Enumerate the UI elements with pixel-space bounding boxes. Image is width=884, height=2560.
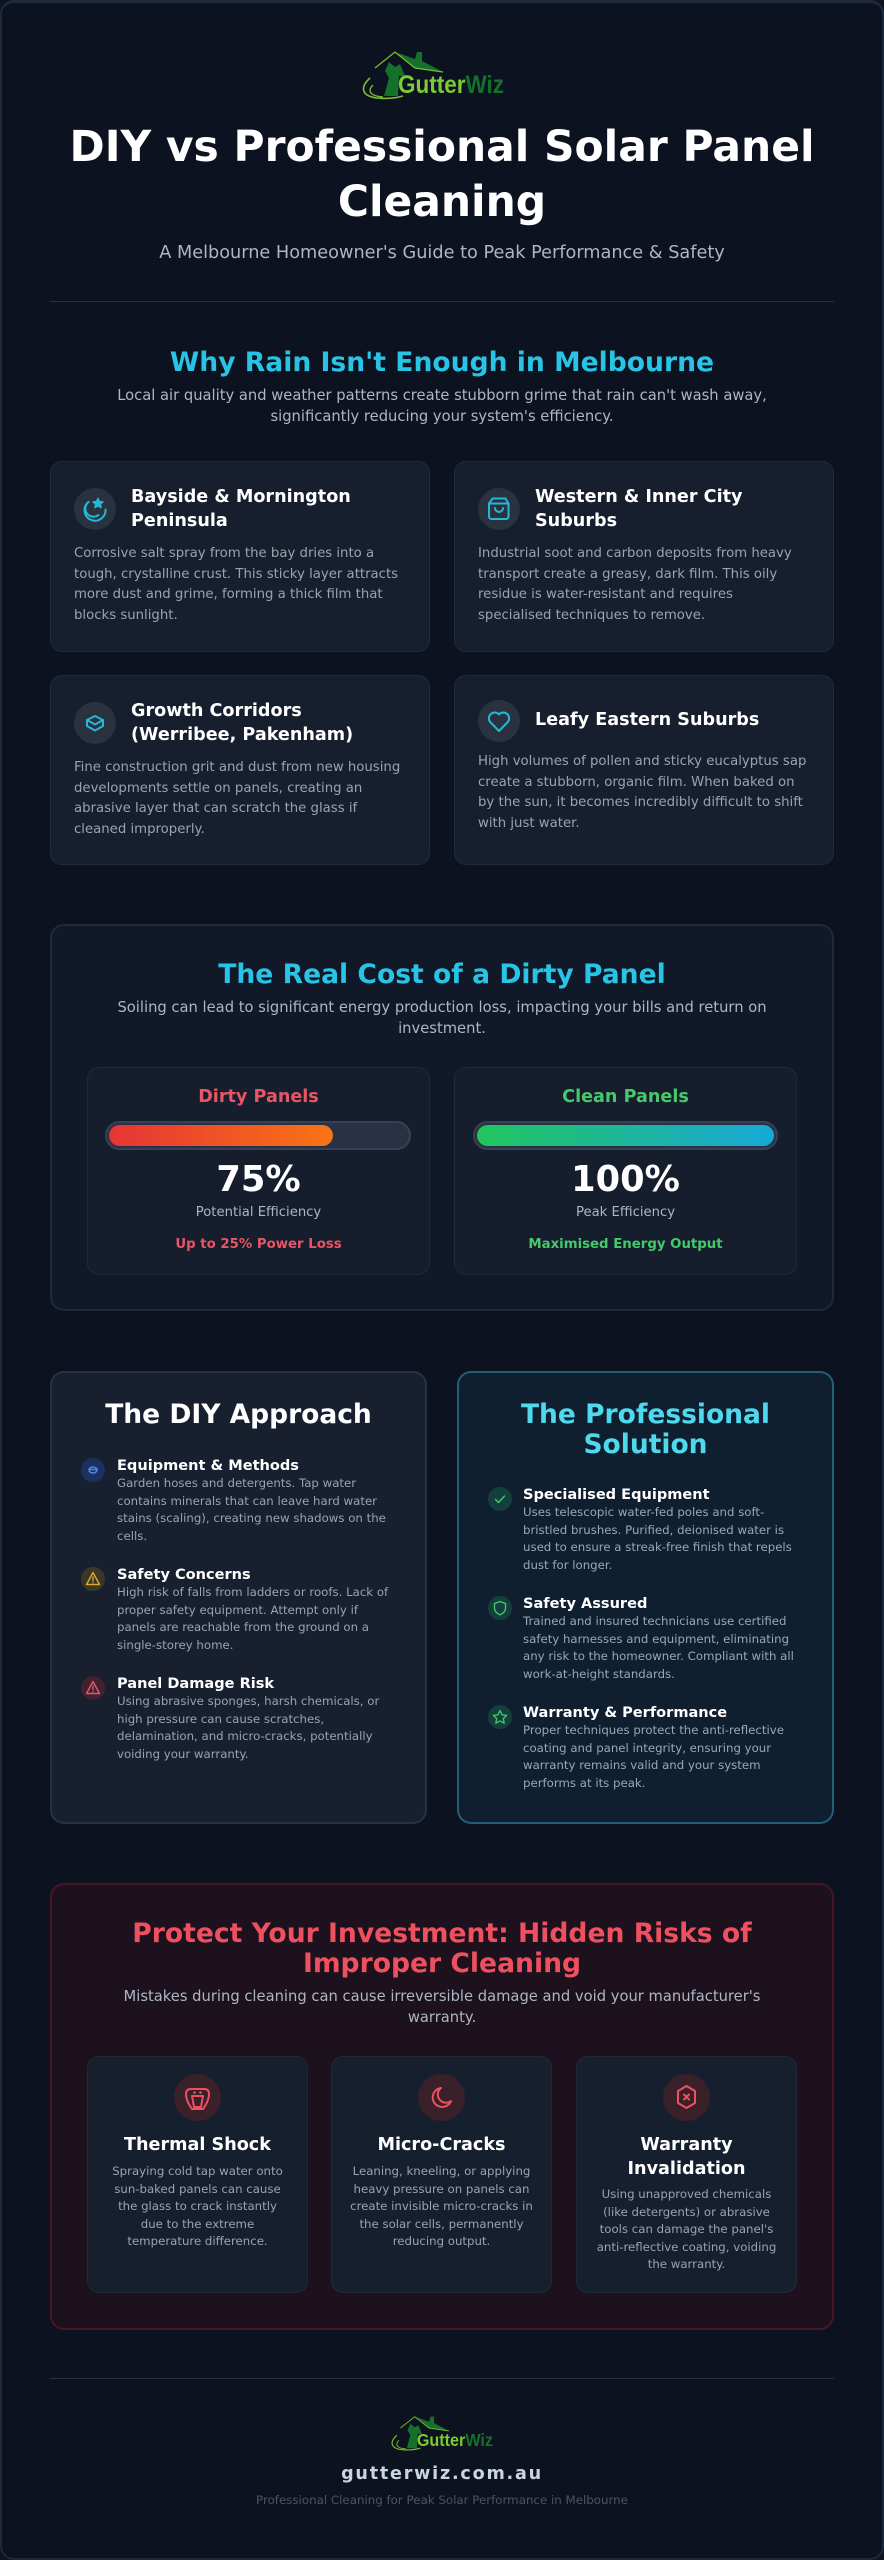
panel: DIY approach [50,1371,427,1824]
intro text [124,1988,760,2026]
item title: Equipment & Methods [117,1457,299,1474]
item text: proper safety equipment. Attempt only if [117,1603,358,1617]
item text: Trained and insured technicians use certified [523,1614,786,1628]
heading: The Real Cost of a Dirty Panel [218,958,666,990]
logo: GutterWiz footer [392,2416,493,2450]
sub-panel: dirty panels [87,1067,430,1275]
card heading [131,487,351,531]
card text: temperature difference. [127,2234,268,2248]
item text: single-storey home. [117,1638,233,1652]
card title: Thermal Shock [124,2135,271,2155]
item text: coating and panel integrity, ensuring your [523,1741,771,1755]
card heading: Peninsula [131,511,228,531]
icon: bag [478,488,520,530]
card text [350,2164,533,2248]
item: safety assured [488,1595,794,1681]
item text [523,1723,784,1790]
item text: voiding your warranty. [117,1747,248,1761]
item text: Uses telescopic water-fed poles and soft- [523,1505,764,1519]
card text: create a stubborn, organic film. When baked on [478,775,794,790]
card heading: Suburbs [535,511,617,531]
card text: cleaned improperly. [74,822,205,837]
card text: specialised techniques to remove. [478,608,705,623]
card text: sun-baked panels can cause [114,2182,281,2196]
subtitle: A Melbourne Homeowner's Guide to Peak Performance & Safety [159,243,725,263]
panel: Eastern suburbs card [454,675,834,865]
item text [117,1694,380,1761]
text: why rain intro: Local air quality and weather patterns create stubborn grime that rain can't wash away, [117,386,767,404]
card text: Fine construction grit and dust from new housing [74,760,400,775]
card text: Spraying cold tap water onto [112,2164,283,2178]
icon: crescent [418,2074,465,2121]
item text: bristled brushes. Purified, deionised water is [523,1523,784,1537]
label: Dirty Panels [198,1087,319,1107]
card text [74,546,398,623]
item: equipment and methods [81,1457,386,1543]
icon: box [74,702,116,744]
item: specialised equipment [488,1486,792,1572]
item: panel damage risk [81,1675,380,1761]
item: safety concerns [81,1566,388,1652]
card text: with just water. [478,816,580,831]
card text: High volumes of pollen and sticky eucalyptus sap [478,754,806,769]
caption: Potential Efficiency [196,1205,321,1220]
card title: Invalidation [628,2159,746,2179]
item text [522,1614,794,1681]
item text: Garden hoses and detergents. Tap water [117,1476,356,1490]
item text: cells. [117,1529,147,1543]
card text [478,546,792,623]
footer website: gutterwiz.com.au [341,2464,543,2484]
bar: 100% [473,1121,778,1150]
item title: Warranty & Performance [523,1704,727,1721]
item text: safety harnesses and equipment, eliminating [523,1632,789,1646]
icon: shield [488,1596,512,1620]
card text: the solar cells, permanently [359,2217,524,2231]
value: 75% [216,1159,301,1200]
card text: anti-reflective coating, voiding [597,2240,776,2254]
bar: 75% [105,1121,411,1150]
card text: transport create a greasy, dark film. This oily [478,567,777,582]
caption: Peak Efficiency [576,1205,675,1220]
title: Cleaning [338,177,546,226]
item text [117,1585,388,1652]
item text: used to ensure a streak-free finish that repels [523,1540,792,1554]
panel: Western card [454,461,834,652]
icon: hexagon x [663,2074,710,2121]
card text: tools can damage the panel's [600,2222,773,2236]
footer tagline: Professional Cleaning for Peak Solar Performance in Melbourne [256,2493,628,2507]
title: DIY vs Professional Solar Panel [70,122,814,171]
card heading: Growth Corridors [131,701,302,721]
card text: developments settle on panels, creating an [74,781,362,796]
item: warranty and performance [488,1704,784,1790]
card text: the warranty. [648,2257,725,2271]
card text: Industrial soot and carbon deposits from heavy [478,546,792,561]
card text: abrasive layer that can scratch the glass if [74,801,357,816]
card text: blocks sunlight. [74,608,178,623]
icon: check [488,1487,512,1511]
card title [628,2135,746,2179]
panel: hidden risks [50,1883,834,2330]
card text: create invisible micro-cracks in [350,2199,533,2213]
icon: red warning [81,1676,105,1700]
item text [117,1476,386,1543]
card text [112,2164,283,2248]
value: 100% [571,1159,680,1200]
heading: Improper Cleaning [303,1948,581,1979]
icon: blue [81,1458,105,1482]
item text: contains minerals that can leave hard water [117,1494,377,1508]
item title: Safety Concerns [117,1566,251,1583]
panel: professional solution [457,1371,834,1824]
item text: high pressure can cause scratches, [117,1712,324,1726]
item text: Using abrasive sponges, harsh chemicals, or [117,1694,379,1708]
item text: performs at its peak. [523,1776,645,1790]
icon: thermal [174,2074,221,2121]
card heading [131,701,353,745]
heading: The Professional [521,1399,770,1430]
item title: Specialised Equipment [523,1486,710,1503]
text: why rain intro: significantly reducing your system's efficiency. [270,408,614,424]
heading [132,1918,752,1979]
heading [521,1399,770,1460]
heading: Solution [583,1429,708,1460]
item title: Safety Assured [523,1595,647,1612]
item text [523,1505,792,1572]
panel: Bayside card [50,461,430,652]
item text: any risk to the homeowner. Compliant with all [523,1649,794,1663]
card heading [535,487,742,531]
heading: Protect Your Investment: Hidden Risks of [132,1918,752,1949]
icon: amber warning [81,1567,105,1591]
card text: due to the extreme [141,2217,254,2231]
note: Up to 25% Power Loss [175,1237,342,1252]
icon: moon and star [74,488,116,530]
label: Clean Panels [562,1087,689,1107]
intro text: Mistakes during cleaning can cause irreversible damage and void your manufacturer's [124,1988,760,2004]
card text [597,2187,776,2271]
card: micro-cracks [331,2056,552,2293]
intro text: investment. [398,1020,486,1036]
card text: more dust and grime, forming a thick film that [74,587,383,602]
card heading: Bayside & Mornington [131,487,351,507]
icon: star [488,1705,512,1729]
panel: real cost [50,924,834,1311]
panel: Growth corridors card [50,675,430,865]
card text: Using unapproved chemicals [602,2187,771,2201]
item text: Proper techniques protect the anti-reflective [523,1723,784,1737]
card text: reducing output. [393,2234,490,2248]
card heading: Leafy Eastern Suburbs [535,710,759,730]
note: Maximised Energy Output [528,1237,723,1252]
intro text [117,998,767,1036]
item text: delamination, and micro-cracks, potentially [117,1729,373,1743]
title [70,122,814,226]
sub-panel: clean panels [454,1067,797,1275]
card text: tough, crystalline crust. This sticky layer attracts [74,567,398,582]
card heading: (Werribee, Pakenham) [131,725,353,745]
card: warranty invalidation [576,2056,797,2293]
card text: (like detergents) or abrasive [603,2205,770,2219]
intro text: warranty. [408,2008,476,2026]
item text: High risk of falls from ladders or roofs. Lack of [117,1585,388,1599]
card title: Warranty [640,2135,733,2155]
card text: Corrosive salt spray from the bay dries into a [74,546,374,561]
heading: why rain isn't enough: Why Rain Isn't Enough in Melbourne [170,347,714,378]
item text: work-at-height standards. [523,1667,675,1681]
item text: dust for longer. [523,1558,612,1572]
card text: by the sun, it becomes incredibly difficult to shift [478,795,803,810]
card heading: Western & Inner City [535,487,742,507]
card text [478,754,806,831]
card: thermal shock [87,2056,308,2293]
icon: heart [478,700,520,742]
item title: Panel Damage Risk [117,1675,274,1692]
card text [74,760,400,837]
item text: stains (scaling), creating new shadows on the [117,1511,386,1525]
card title: Micro-Cracks [377,2135,506,2155]
card text: Leaning, kneeling, or applying [353,2164,530,2178]
text: why rain intro [117,386,767,424]
intro text: Soiling can lead to significant energy production loss, impacting your bills and return on [117,998,767,1016]
card text: heavy pressure on panels can [354,2182,529,2196]
card text: residue is water-resistant and requires [478,587,733,602]
card text: the glass to crack instantly [118,2199,277,2213]
logo: GutterWiz header [362,51,504,100]
item text: panels are reachable from the ground on a [117,1620,369,1634]
heading: The DIY Approach [105,1399,372,1430]
item text: warranty remains valid and your system [523,1758,761,1772]
